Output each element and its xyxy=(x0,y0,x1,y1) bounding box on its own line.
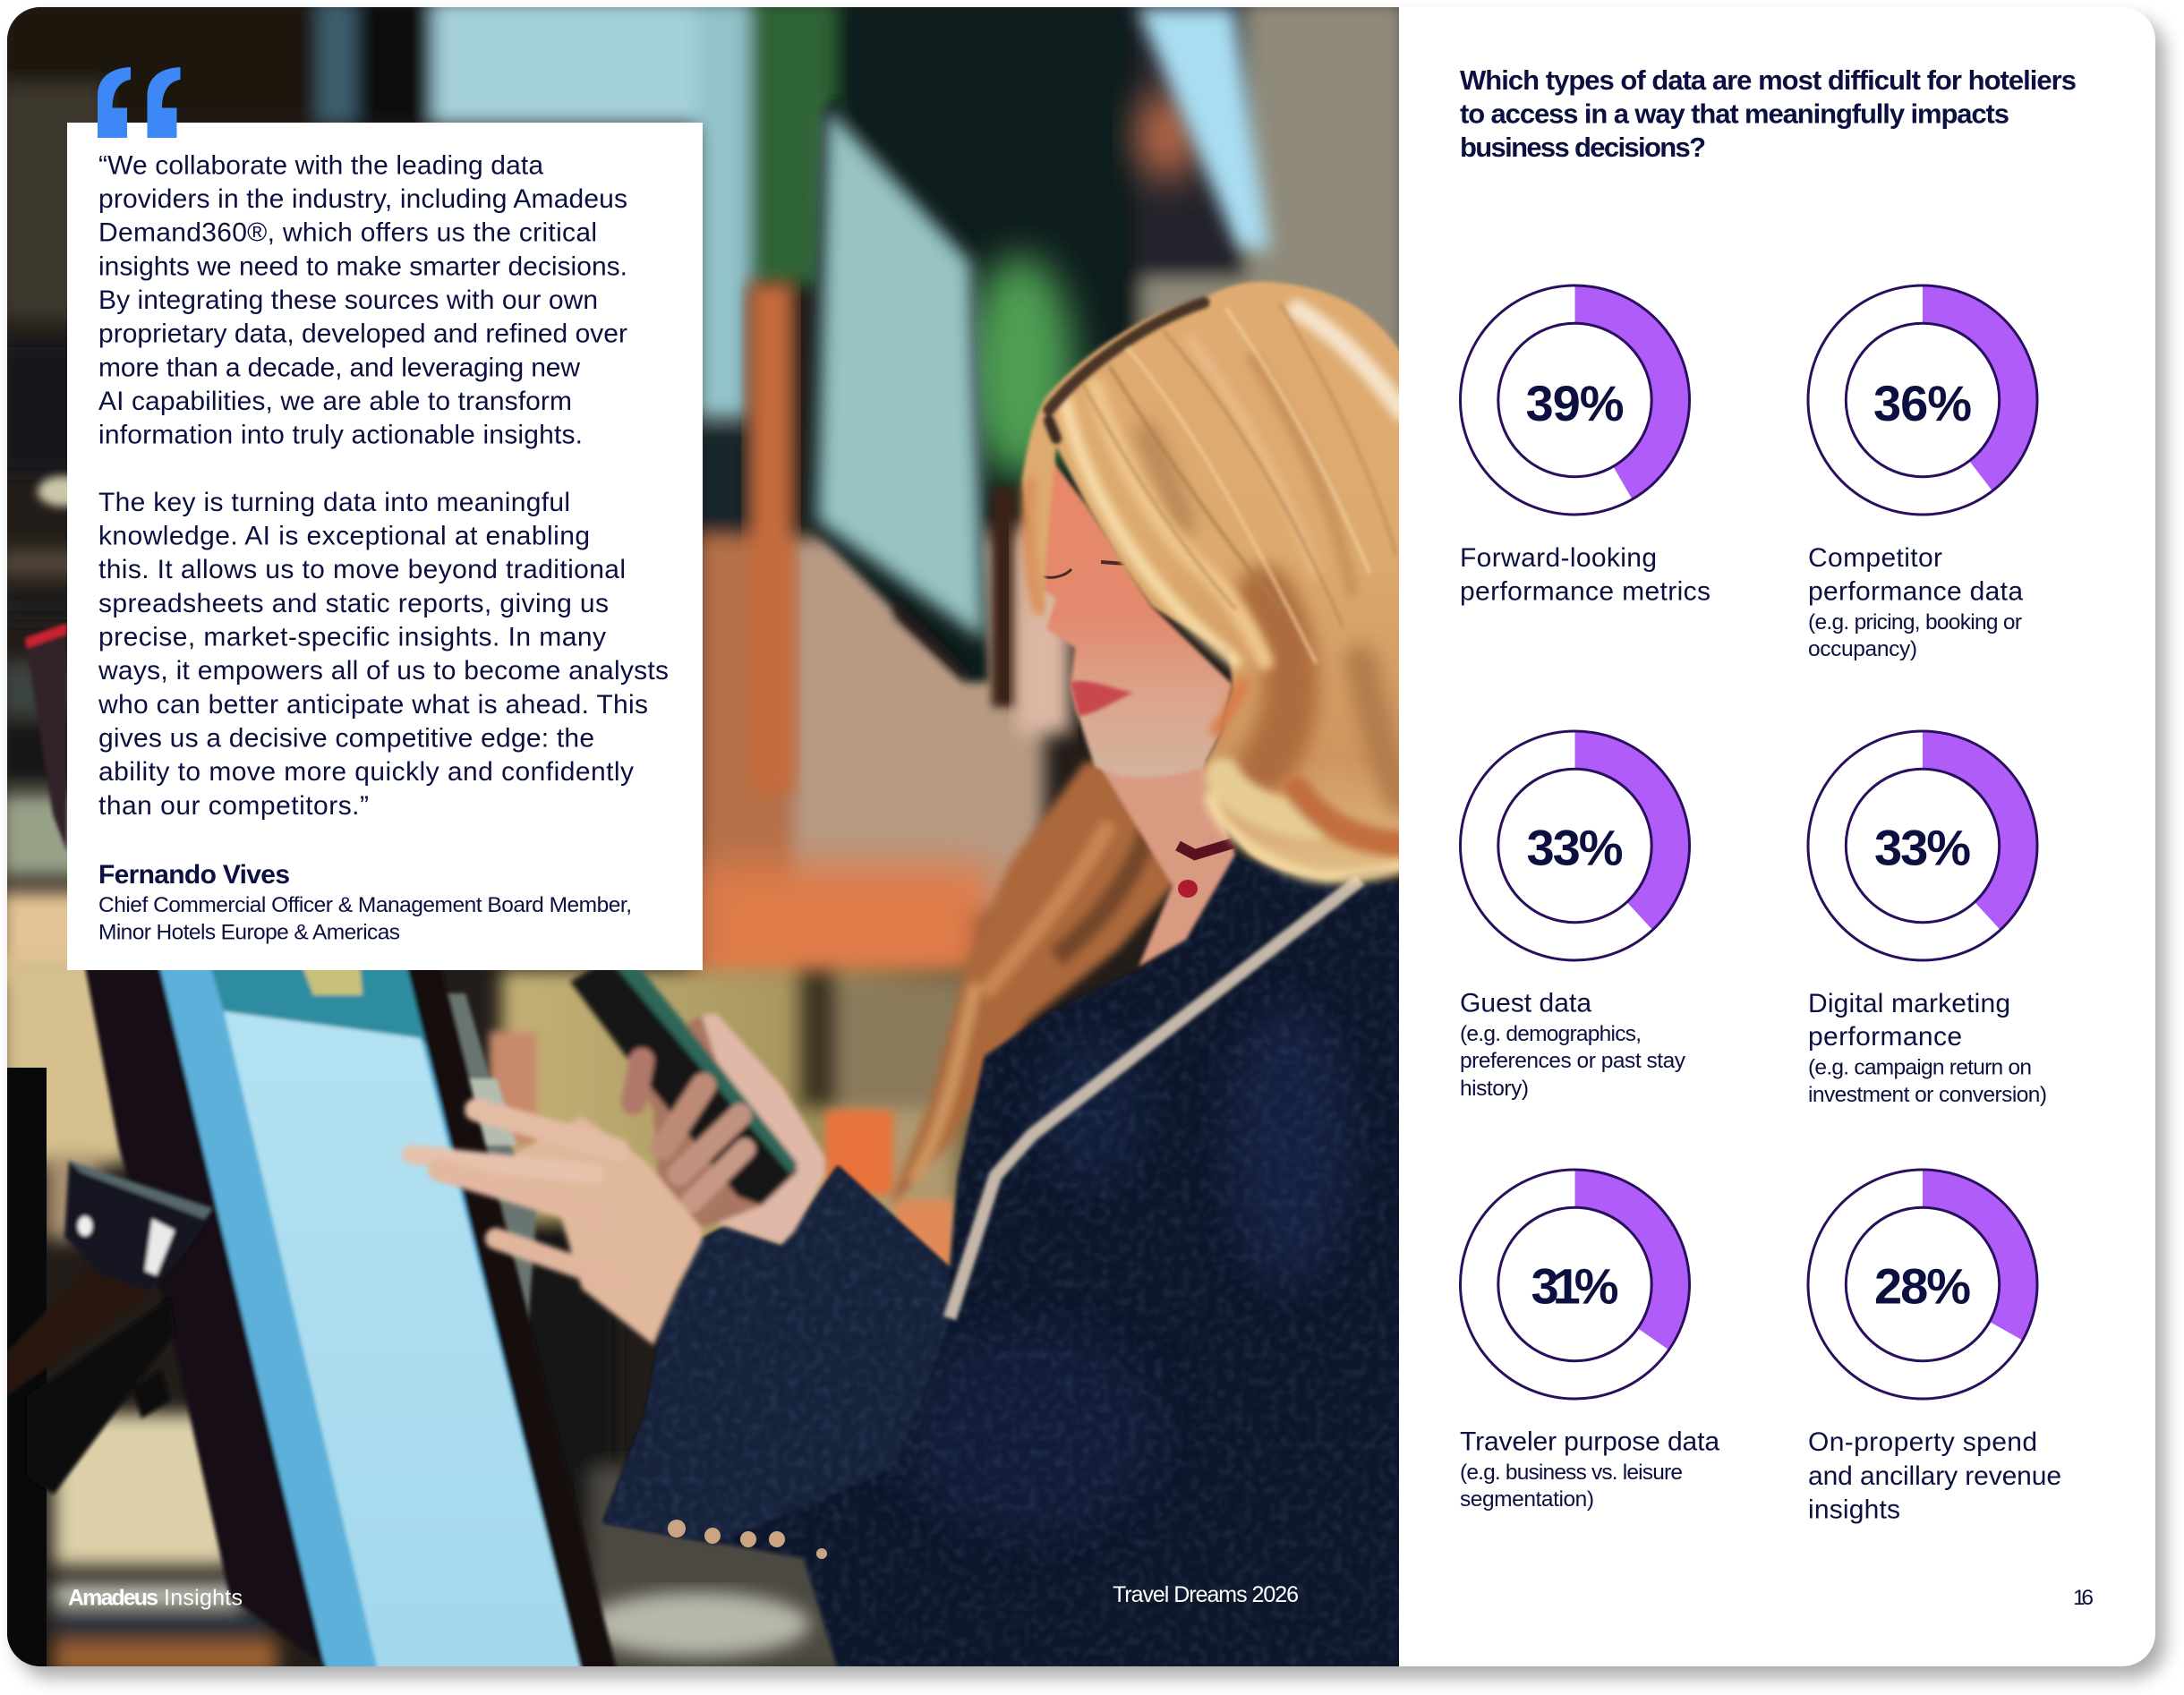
donut chart: 31% xyxy=(1461,1170,1690,1399)
label: guest data: Guest data xyxy=(1460,989,1591,1018)
quote text, first paragraph: By integrating these sources with our own xyxy=(98,285,598,315)
label: guest data: preferences or past stay xyxy=(1460,1049,1686,1073)
footer label: Amadeus Insights: Amadeus xyxy=(68,1586,158,1611)
donut chart: 33% guest data xyxy=(1461,731,1690,960)
label: on-property spend: insights xyxy=(1808,1495,1900,1525)
label: digital marketing performance: performance xyxy=(1808,1022,1962,1052)
label: competitor performance data: Competitor xyxy=(1808,543,1942,573)
label: on-property spend: On-property spend xyxy=(1808,1427,2037,1457)
sweater knit texture xyxy=(603,853,1405,1674)
kiosk post xyxy=(7,1068,47,1676)
label: digital marketing performance xyxy=(1808,989,2047,1107)
heading xyxy=(1460,64,2077,163)
maroon device at left xyxy=(25,626,67,852)
footer label: Travel Dreams 2026: Travel Dreams 2026 xyxy=(1113,1582,1299,1607)
quote text, first paragraph: AI capabilities, we are able to transform xyxy=(98,387,572,416)
donut chart: 33% digital marketing: 33% xyxy=(1874,820,1971,876)
heading: Which types of data are most difficult for hoteliers xyxy=(1460,64,2077,96)
quote text, second paragraph: ways, it empowers all of us to become analysts xyxy=(98,656,669,686)
sleeve beads xyxy=(668,1520,827,1559)
label: guest data: (e.g. demographics, xyxy=(1460,1022,1642,1046)
label: traveler purpose data xyxy=(1460,1427,1719,1512)
icon: blue quotation mark xyxy=(98,67,181,138)
label: guest data xyxy=(1460,989,1686,1101)
donut chart: 36% xyxy=(1808,285,2037,515)
label: on-property spend xyxy=(1808,1427,2061,1525)
donut chart: 31%: 31% xyxy=(1531,1258,1618,1315)
quote text, second paragraph: who can better anticipate what is ahead. This xyxy=(98,690,648,720)
label: guest data: history) xyxy=(1460,1077,1529,1101)
touching hand xyxy=(478,1116,702,1345)
donut chart: 28% xyxy=(1808,1170,2037,1399)
long hair strands xyxy=(891,762,1182,1206)
label: forward-looking performance metrics: performance metrics xyxy=(1460,577,1711,607)
quote text, second paragraph: ability to move more quickly and confidently xyxy=(98,757,634,787)
kiosk: second device xyxy=(437,993,537,1324)
attribution: Chief Commercial Officer & Management Board Member, xyxy=(98,893,632,917)
blurred plant xyxy=(967,255,1074,479)
label: competitor performance data: occupancy) xyxy=(1808,637,1917,661)
donut chart: 39% xyxy=(1461,285,1690,515)
blurred orange floor xyxy=(698,864,994,998)
quote text, first paragraph: “We collaborate with the leading data xyxy=(98,150,543,180)
quote text, second paragraph: gives us a decisive competitive edge: the xyxy=(98,723,594,753)
attribution: Fernando Vives xyxy=(98,860,290,890)
quote text, second paragraph xyxy=(98,488,669,821)
quote text, first paragraph: providers in the industry, including Amadeus xyxy=(98,184,627,214)
label: digital marketing performance: Digital marketing xyxy=(1808,989,2010,1018)
attribution: Minor Hotels Europe & Americas xyxy=(98,920,400,945)
quote text, second paragraph: precise, market-specific insights. In many xyxy=(98,623,606,652)
label: forward-looking performance metrics xyxy=(1460,543,1711,607)
front sleeve overlap xyxy=(603,1166,950,1544)
quote text, second paragraph: spreadsheets and static reports, giving us xyxy=(98,589,609,618)
hair xyxy=(1022,282,1405,879)
quote text, first paragraph: insights we need to make smarter decisions. xyxy=(98,251,627,281)
label: digital marketing performance: (e.g. campaign return on xyxy=(1808,1056,2032,1080)
label: competitor performance data xyxy=(1808,543,2023,661)
donut chart: 33% guest data: 33% xyxy=(1527,820,1624,876)
donut chart: 39%: 39% xyxy=(1525,375,1624,431)
quote text, second paragraph: than our competitors.” xyxy=(98,791,369,821)
phone fingers xyxy=(634,1060,745,1203)
panel: quote xyxy=(67,123,703,970)
quote text, first paragraph xyxy=(98,150,627,450)
heading: business decisions? xyxy=(1460,132,1706,163)
photo: woman using a check-in kiosk xyxy=(0,0,1407,1676)
phone xyxy=(570,965,798,1205)
donut chart: 36%: 36% xyxy=(1873,375,1972,431)
footer label: Amadeus Insights: Insights xyxy=(164,1586,243,1611)
label: forward-looking performance metrics: Forward-looking xyxy=(1460,543,1657,573)
label: digital marketing performance: investment or conversion) xyxy=(1808,1083,2047,1107)
kiosk frame xyxy=(82,970,326,1665)
face xyxy=(1040,456,1233,778)
donut chart: 28%: 28% xyxy=(1874,1258,1971,1315)
quote text, first paragraph: proprietary data, developed and refined over xyxy=(98,319,627,349)
quote text, first paragraph: information into truly actionable insights. xyxy=(98,421,583,450)
neck and necklace xyxy=(1096,761,1235,967)
lower background xyxy=(0,958,985,1675)
label: competitor performance data: performance data xyxy=(1808,577,2023,607)
quote text, second paragraph: The key is turning data into meaningful xyxy=(98,488,570,517)
heading: to access in a way that meaningfully impacts xyxy=(1460,98,2009,130)
quote text, second paragraph: knowledge. AI is exceptional at enabling xyxy=(98,521,590,551)
phone hand xyxy=(646,1015,794,1228)
label: traveler purpose data: (e.g. business vs. leisure xyxy=(1460,1461,1683,1485)
label: on-property spend: and ancillary revenue xyxy=(1808,1461,2061,1491)
label: competitor performance data: (e.g. pricing, booking or xyxy=(1808,610,2022,635)
donut chart: 33% digital marketing xyxy=(1808,731,2037,960)
quote text, first paragraph: more than a decade, and leveraging new xyxy=(98,353,580,382)
sweater xyxy=(603,853,1405,1674)
label: traveler purpose data: segmentation) xyxy=(1460,1487,1594,1512)
footer label: Amadeus Insights xyxy=(68,1586,243,1611)
quote text, second paragraph: this. It allows us to move beyond traditional xyxy=(98,555,626,584)
label: traveler purpose data: Traveler purpose data xyxy=(1460,1427,1719,1457)
quote text, first paragraph: Demand360®, which offers us the critical xyxy=(98,218,597,248)
shoulder strap xyxy=(950,880,1361,1318)
kiosk bracket xyxy=(7,1161,213,1495)
page number: 16 xyxy=(2073,1586,2094,1610)
attribution xyxy=(98,860,632,945)
